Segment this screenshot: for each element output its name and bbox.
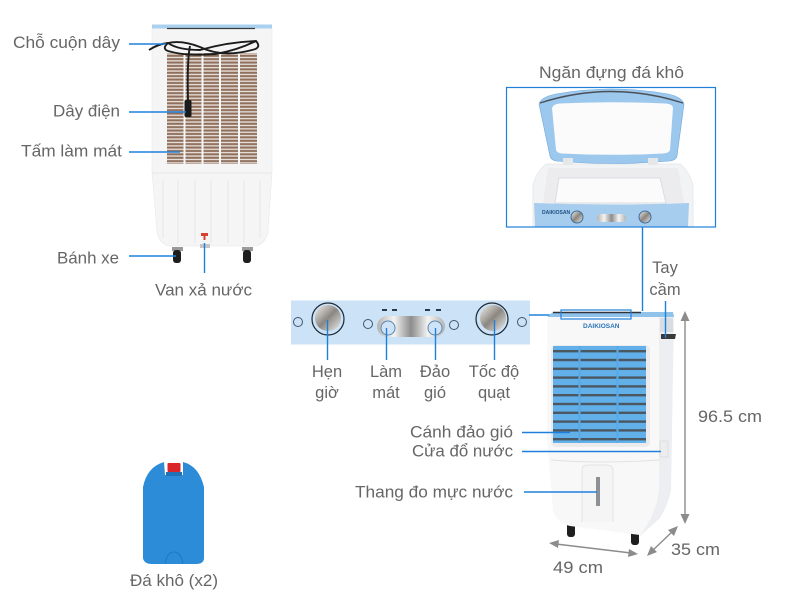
frame (506, 88, 716, 227)
label: Làm mát line 2: mát (372, 384, 400, 402)
panel icons (294, 318, 526, 330)
leader: Đảo gió (434, 328, 436, 360)
brand text: DAIKIOSAN (542, 210, 570, 216)
ice tray (555, 178, 666, 203)
wheels (567, 520, 639, 545)
leader: Thang đo mực nước (524, 491, 597, 493)
label: Hẹn giờ line 2: giờ (315, 384, 339, 402)
leader: Làm mát (386, 328, 388, 360)
label: Đảo gió line 2: gió (424, 384, 446, 402)
side panel (640, 314, 674, 536)
control band (534, 203, 689, 227)
compartment cavity (543, 168, 684, 203)
handle highlight (561, 310, 631, 319)
leader: Bánh xe (129, 255, 176, 257)
handle (661, 334, 676, 339)
top lid (547, 312, 674, 317)
label: Cánh đảo gió: Cánh đảo gió (410, 424, 513, 442)
label: Bánh xe: Bánh xe (57, 250, 119, 268)
label: Tay cầm line 2: cầm (649, 281, 681, 299)
leader: Dây điện (129, 111, 186, 113)
plug (184, 100, 192, 117)
water fill door (660, 441, 668, 457)
ice pack base arc (165, 552, 183, 564)
water level gauge (596, 477, 600, 506)
rear view of cooler (149, 24, 272, 263)
label: Tốc độ quạt: Tốc độ (469, 363, 519, 381)
panel: ice compartment detail (506, 88, 716, 227)
vent louvers (553, 346, 646, 443)
leader: Tấm làm mát (129, 151, 180, 153)
label: 35 cm: 35 cm (671, 541, 720, 559)
drain valve (200, 233, 210, 248)
label: 96.5 cm: 96.5 cm (698, 408, 762, 426)
label: Tay cầm: Tay (652, 259, 679, 277)
label: Chỗ cuộn dây: Chỗ cuộn dây (13, 33, 121, 52)
timer knob (312, 303, 344, 335)
label: Đá khô (x2): Đá khô (x2) (130, 572, 218, 590)
speed knob (476, 303, 508, 335)
rear lid strip (152, 24, 272, 28)
mode marks (382, 309, 441, 311)
leader: Chỗ cuộn dây (129, 43, 166, 45)
cooling pad grille (167, 53, 257, 164)
arrow: height (680, 311, 690, 524)
rear wheels (172, 247, 253, 263)
leader: Tốc độ quạt (494, 320, 496, 360)
label: Hẹn giờ: Hẹn (312, 363, 342, 381)
label: Dây điện: Dây điện (53, 102, 120, 120)
side sticker (660, 318, 673, 332)
hinges (563, 158, 658, 165)
leader: Hẹn giờ (326, 320, 328, 360)
leader: handle (529, 314, 561, 316)
leader: Cửa đổ nước (522, 450, 661, 452)
front view of cooler (547, 310, 676, 545)
leader: Van xả nước (204, 243, 206, 273)
label: Làm mát: Làm (370, 363, 402, 381)
label: Ngăn đựng đá khô: Ngăn đựng đá khô (539, 64, 684, 82)
ice pack neck (166, 472, 182, 476)
ice pack cap (168, 463, 180, 472)
panel background (291, 300, 530, 344)
label: Van xả nước: Van xả nước (155, 282, 252, 300)
power cord (149, 41, 258, 101)
open lid (539, 89, 684, 164)
rear body (152, 28, 272, 246)
leader: Ngăn đựng đá khô (642, 227, 644, 311)
center plate (377, 316, 445, 337)
gauge housing (582, 465, 613, 522)
arrow: depth (647, 526, 678, 556)
rear lid edge (167, 28, 255, 30)
band knobs (571, 211, 651, 223)
icon: ice pack (143, 462, 204, 564)
lower panel ribs (152, 173, 272, 243)
compartment body (533, 164, 693, 227)
front panel (547, 317, 659, 535)
label: Thang đo mực nước: Thang đo mực nước (355, 484, 513, 502)
label: Đảo gió: Đảo (420, 363, 450, 381)
tank seam (551, 460, 660, 462)
label: Tấm làm mát: Tấm làm mát (21, 142, 122, 160)
label: Cửa đổ nước: Cửa đổ nước (412, 442, 513, 460)
leader: Tay cầm (664, 301, 666, 338)
top dark edge (553, 312, 641, 314)
control panel close-up (291, 300, 530, 344)
brand: DAIKIOSAN (583, 323, 620, 330)
arrow: width (549, 540, 638, 557)
label: Tốc độ quạt line 2: quạt (478, 384, 510, 402)
vent frame (551, 345, 650, 447)
leader: Cánh đảo gió (522, 432, 570, 434)
label: 49 cm: 49 cm (553, 559, 603, 577)
